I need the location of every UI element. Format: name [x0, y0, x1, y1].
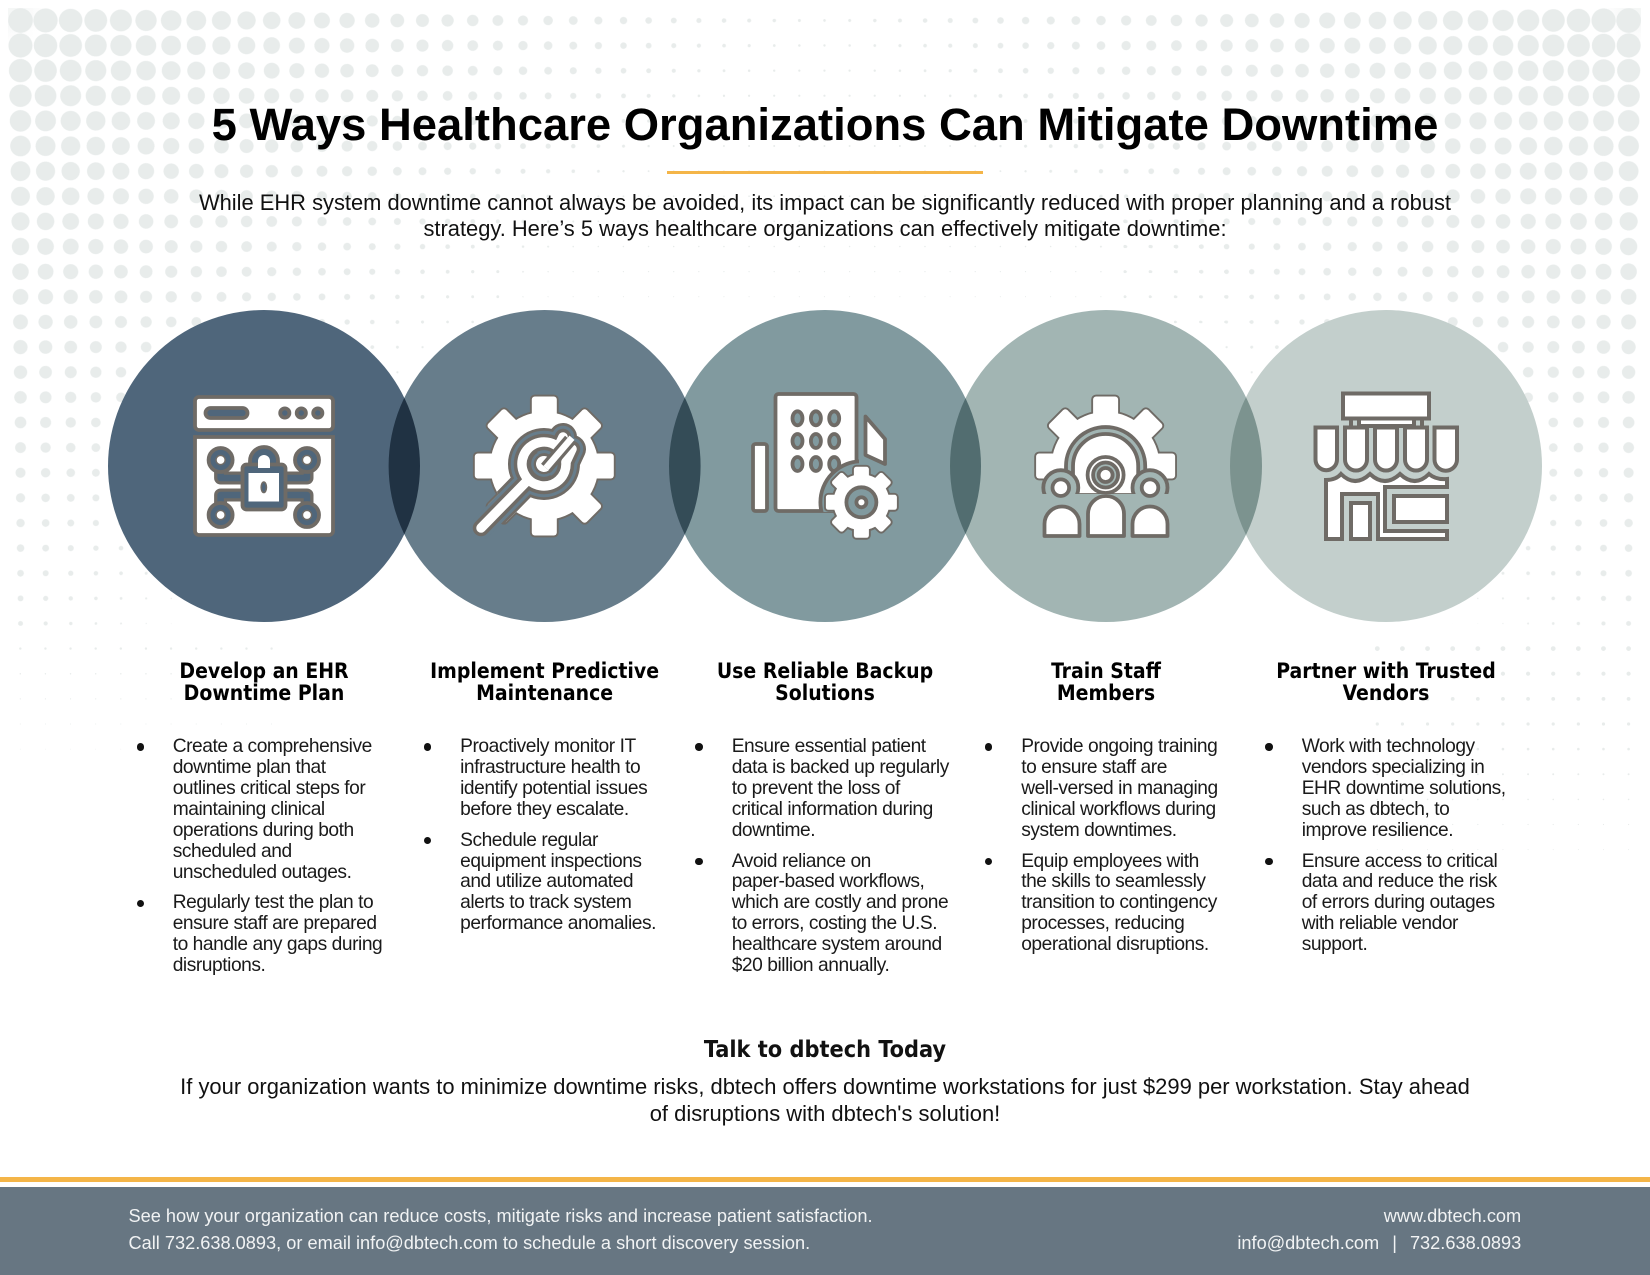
column 3 bullets: [695, 736, 950, 976]
column heading: Use Reliable Backup Solutions: [717, 658, 933, 704]
column 1 bullets: scheduled and: [173, 841, 292, 862]
column 5 bullets: improve resilience.: [1302, 820, 1453, 841]
column 1 bullets: ensure staff are prepared: [173, 913, 377, 934]
column heading: Partner with Trusted Vendors: Partner with Trusted: [1276, 658, 1496, 682]
column 3 bullets: paper-based workflows,: [732, 871, 924, 892]
column 5 bullets: [1265, 736, 1506, 955]
column heading: Implement Predictive Maintenance: Maintenance: [476, 680, 613, 704]
footer left text: Call 732.638.0893, or email info@dbtech.com to schedule a short discovery session.: [128, 1232, 810, 1252]
column 4 bullets: Provide ongoing training: [1021, 736, 1217, 757]
column 5 bullets: with reliable vendor: [1302, 913, 1458, 934]
call to action heading: Talk to dbtech Today: [704, 1036, 946, 1063]
column 5 bullets: such as dbtech, to: [1302, 799, 1449, 820]
column 4 bullets: the skills to seamlessly: [1021, 871, 1206, 892]
icon: browser window with secured circuit lock: [195, 397, 333, 535]
column 5 bullets: of errors during outages: [1302, 892, 1495, 913]
column 4 bullets: clinical workflows during: [1021, 799, 1216, 820]
footer right contact: www.dbtech.com: [1384, 1206, 1521, 1226]
column 3 bullets: to errors, costing the U.S.: [732, 913, 937, 934]
column 1 bullets: maintaining clinical: [173, 799, 325, 820]
column 5 bullets: EHR downtime solutions,: [1302, 778, 1506, 799]
column 1 bullets: outlines critical steps for: [173, 778, 365, 799]
column 4 bullets: Equip employees with: [1021, 851, 1199, 872]
column 5 bullets: data and reduce the risk: [1302, 871, 1497, 892]
column 3 bullets: data is backed up regularly: [732, 757, 949, 778]
column heading: Partner with Trusted Vendors: [1276, 658, 1496, 704]
column 3 bullets: Avoid reliance on: [732, 851, 871, 872]
intro text: While EHR system downtime cannot always be avoided, its impact can be significantly reduced with proper planning and a robust: [199, 190, 1451, 215]
icon: gear with three people: [1034, 394, 1177, 538]
column heading: Partner with Trusted Vendors: Vendors: [1343, 680, 1429, 704]
column heading: Use Reliable Backup Solutions: Solutions: [775, 680, 875, 704]
column 2 bullets: before they escalate.: [460, 799, 629, 820]
column heading: Use Reliable Backup Solutions: Use Reliable Backup: [717, 658, 933, 682]
column 5 bullets: Work with technology: [1302, 736, 1475, 757]
intro text: strategy. Here’s 5 ways healthcare organizations can effectively mitigate downtime:: [423, 216, 1227, 241]
column 2 bullets: equipment inspections: [460, 851, 642, 872]
column 1 bullets: downtime plan that: [173, 757, 326, 778]
column 3 bullets: $20 billion annually.: [732, 955, 889, 976]
column 5 bullets: vendors specializing in: [1302, 757, 1484, 778]
column heading: Train Staff Members: Train Staff: [1051, 658, 1161, 682]
footer right contact: [1237, 1206, 1521, 1253]
column heading: Implement Predictive Maintenance: Implement Predictive: [430, 658, 659, 682]
column 1 bullets: to handle any gaps during: [173, 934, 382, 955]
column 3 bullets: to prevent the loss of: [732, 778, 900, 799]
icon: storefront: [1316, 394, 1457, 539]
column 5 bullets: support.: [1302, 934, 1367, 955]
circles: [108, 310, 1542, 622]
column heading: Train Staff Members: [1051, 658, 1162, 704]
column 4 bullets: processes, reducing: [1021, 913, 1184, 934]
column 1 bullets: disruptions.: [173, 955, 265, 976]
icon: building with gear: [753, 394, 902, 543]
column 1 bullets: [137, 736, 382, 976]
footer band: [0, 1187, 1650, 1275]
call to action text: [180, 1074, 1470, 1126]
footer left text: See how your organization can reduce costs, mitigate risks and increase patient satisfaction.: [128, 1206, 873, 1226]
icon: gear with wrench: [475, 396, 614, 536]
column 3 bullets: which are costly and prone: [732, 892, 948, 913]
column 2 bullets: [424, 736, 656, 934]
column 2 bullets: alerts to track system: [460, 892, 631, 913]
call to action text: If your organization wants to minimize downtime risks, dbtech offers downtime workstations for just $299 per workstation. Stay ahead: [180, 1074, 1470, 1099]
footer left text: [128, 1206, 873, 1253]
footer accent stripe: [0, 1177, 1650, 1182]
five overlapping circles with icons: [108, 310, 1542, 622]
column 3 bullets: critical information during: [732, 799, 933, 820]
column 4 bullets: to ensure staff are: [1021, 757, 1167, 778]
circle knock-outs: [108, 310, 1542, 622]
footer right contact: info@dbtech.com | 732.638.0893: [1237, 1232, 1521, 1252]
column 2 bullets: infrastructure health to: [460, 757, 640, 778]
column heading: Train Staff Members: Members: [1057, 680, 1155, 704]
column 4 bullets: [985, 736, 1218, 955]
column 2 bullets: and utilize automated: [460, 871, 633, 892]
column heading: Develop an EHR Downtime Plan: [179, 658, 349, 704]
column 2 bullets: identify potential issues: [460, 778, 647, 799]
column 4 bullets: operational disruptions.: [1021, 934, 1209, 955]
column heading: Develop an EHR Downtime Plan: Downtime Plan: [184, 680, 344, 704]
column 1 bullets: Create a comprehensive: [173, 736, 372, 757]
column 2 bullets: Proactively monitor IT: [460, 736, 636, 757]
column 2 bullets: Schedule regular: [460, 830, 598, 851]
call to action text: of disruptions with dbtech's solution!: [650, 1101, 1000, 1126]
column 4 bullets: transition to contingency: [1021, 892, 1217, 913]
column heading: Implement Predictive Maintenance: [430, 658, 659, 704]
intro text: [199, 190, 1451, 241]
column 5 bullets: Ensure access to critical: [1302, 851, 1497, 872]
column 3 bullets: healthcare system around: [732, 934, 942, 955]
title rule: [667, 171, 983, 174]
column 1 bullets: operations during both: [173, 820, 354, 841]
column 4 bullets: well-versed in managing: [1021, 778, 1218, 799]
column heading: Develop an EHR Downtime Plan: Develop an EHR: [179, 658, 349, 682]
column 2 bullets: performance anomalies.: [460, 913, 656, 934]
halftone dot background: [8, 8, 1641, 850]
column 4 bullets: system downtimes.: [1021, 820, 1177, 841]
column 3 bullets: Ensure essential patient: [732, 736, 926, 757]
title: 5 Ways Healthcare Organizations Can Mitigate Downtime: [212, 99, 1438, 150]
column 3 bullets: downtime.: [732, 820, 815, 841]
column 1 bullets: Regularly test the plan to: [173, 892, 373, 913]
column 1 bullets: unscheduled outages.: [173, 862, 351, 883]
